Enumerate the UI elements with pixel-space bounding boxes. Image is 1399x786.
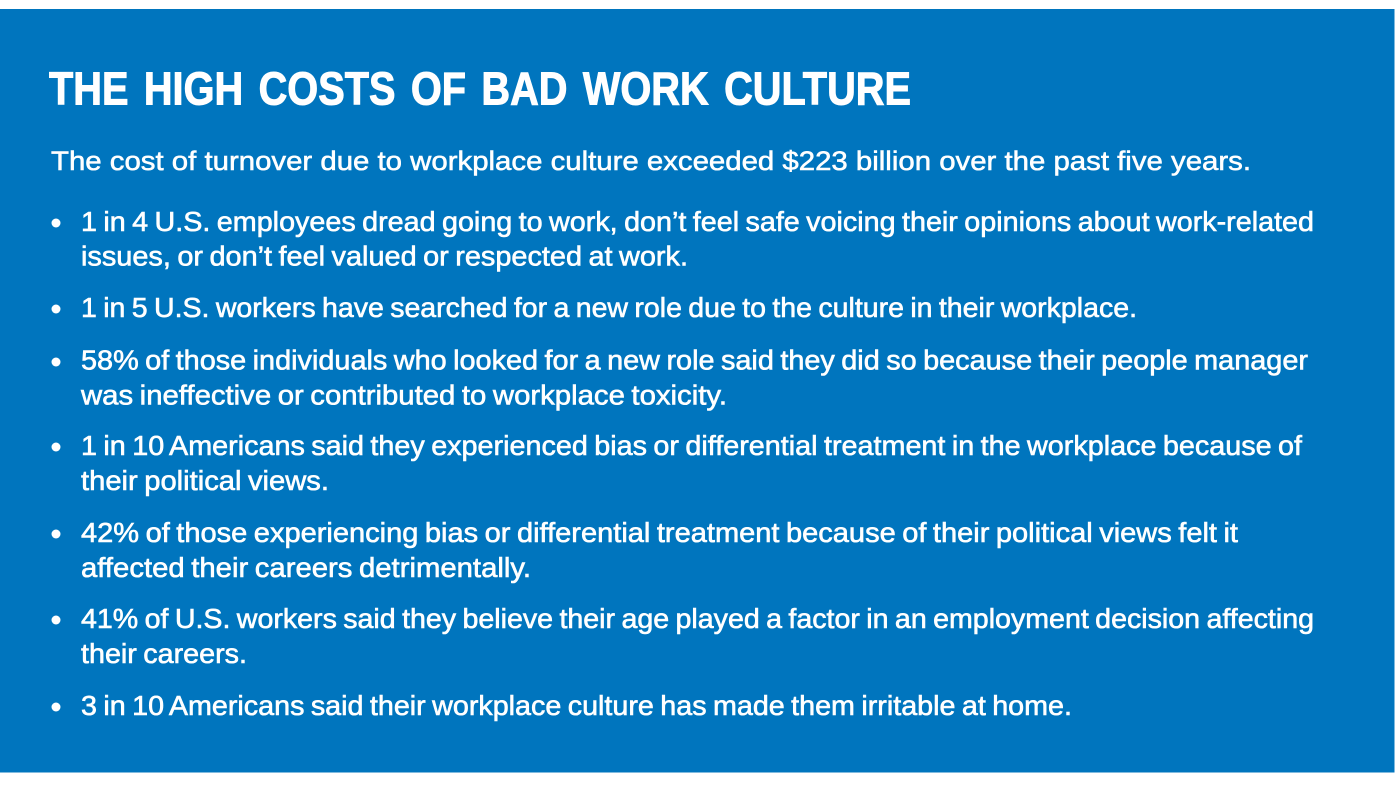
bullet 4: bias from political views: their political views. <box>81 465 329 496</box>
bullet 6: age in employment decisions: their careers. <box>81 638 247 669</box>
bullet list <box>52 206 1314 721</box>
bullet 1: dread going to work: 1 in 4 U.S. employees dread going to work, don’t feel safe voicing their opinions about work-related <box>81 206 1314 237</box>
bullet 3: ineffective people manager: was ineffective or contributed to workplace toxicity. <box>80 380 727 410</box>
bullet 1: dread going to work: issues, or don’t feel valued or respected at work. <box>81 240 688 272</box>
bullet 5: careers affected by bias <box>52 517 1238 583</box>
bullet 6: age in employment decisions: 41% of U.S. workers said they believe their age played a factor in an employment decision affecting <box>81 603 1314 634</box>
bullet 6: age in employment decisions <box>52 603 1314 669</box>
bullet 3: ineffective people manager: 58% of those individuals who looked for a new role said they did so because their people manager <box>81 344 1308 376</box>
bullet 1: dread going to work <box>52 206 1314 272</box>
bullet 5: careers affected by bias: 42% of those experiencing bias or differential treatment because of their political views felt it <box>81 517 1238 548</box>
title: THE HIGH COSTS OF BAD WORK CULTURE <box>49 62 911 114</box>
subtitle: cost of turnover: The cost of turnover due to workplace culture exceeded $223 billion over the past five years. <box>51 146 1251 176</box>
bullet 3: ineffective people manager <box>52 344 1308 410</box>
bullet 7: irritable at home: 3 in 10 Americans said their workplace culture has made them irritable at home. <box>81 690 1072 721</box>
bullet 4: bias from political views <box>52 430 1302 496</box>
bullet 5: careers affected by bias: affected their careers detrimentally. <box>81 552 531 583</box>
bullet 4: bias from political views: 1 in 10 Americans said they experienced bias or differential treatment in the workplace because of <box>81 430 1302 461</box>
bullet 2: searched for a new role: 1 in 5 U.S. workers have searched for a new role due to the culture in their workplace. <box>81 292 1137 323</box>
